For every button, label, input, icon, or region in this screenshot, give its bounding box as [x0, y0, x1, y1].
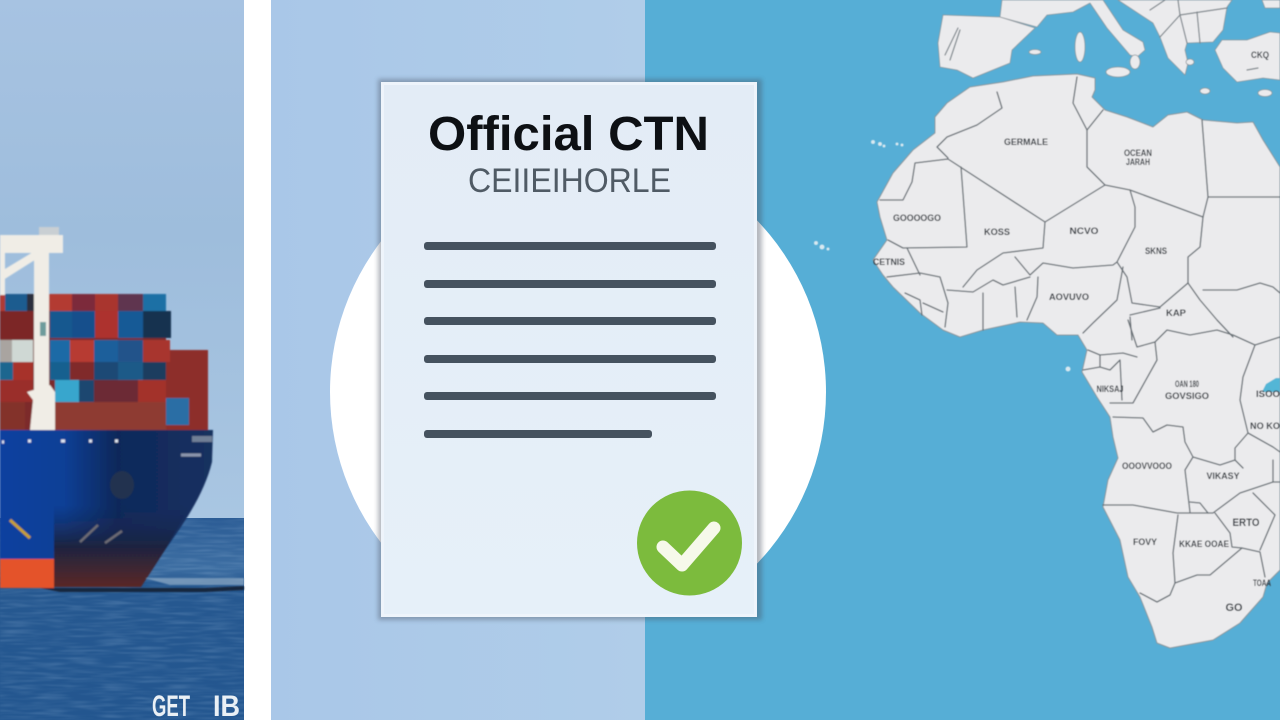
- country labels: ERTO: [1232, 517, 1260, 529]
- country labels: GOVSIGO: [1165, 391, 1209, 401]
- country labels: TOAA: [1253, 578, 1271, 588]
- white circle behind document: [330, 220, 826, 564]
- country labels: ISOO: [1256, 389, 1280, 399]
- document subtitle: CEIIEIHORLE: [468, 162, 671, 200]
- country labels: GERMALE: [1004, 137, 1048, 147]
- red waterline: [0, 559, 54, 588]
- waterline wake: [40, 586, 244, 592]
- document text lines: [424, 242, 716, 438]
- country labels: OOOVVOOO: [1122, 461, 1172, 471]
- document shadow: [378, 79, 762, 620]
- container ship: [0, 227, 244, 592]
- country labels: OCEAN: [1124, 148, 1152, 158]
- Canary and Cape Verde islands: [814, 140, 1070, 372]
- country labels: CKQ: [1251, 50, 1269, 60]
- map of Africa and the Mediterranean: [814, 0, 1280, 648]
- country labels: SKNS: [1145, 246, 1167, 256]
- hull lower dark band: [54, 505, 190, 587]
- Europe borders: [945, 0, 1258, 70]
- sea: [0, 518, 244, 720]
- document title: Official CTN: [428, 108, 709, 161]
- country labels: GO: [1226, 602, 1243, 614]
- icon: green check badge: [637, 490, 742, 596]
- country labels: NCVO: [1070, 226, 1098, 236]
- country labels: KOSS: [984, 227, 1010, 237]
- country labels: KKAE OOAE: [1179, 539, 1229, 549]
- hull: [0, 430, 213, 587]
- country labels: FOVY: [1133, 537, 1157, 547]
- hull details: [2, 436, 212, 543]
- islands: [1075, 32, 1085, 62]
- country borders: [880, 77, 1280, 602]
- panel: container ship photo: [0, 0, 244, 720]
- country labels: KAP: [1166, 308, 1186, 318]
- country labels: GOOOOGO: [893, 213, 941, 223]
- country labels: OAN 180: [1175, 379, 1199, 389]
- document edge highlight: [382, 84, 756, 616]
- country labels: AOVUVO: [1049, 292, 1089, 302]
- sky: [0, 0, 244, 518]
- Africa landmass: [873, 74, 1280, 648]
- country labels: JARAH: [1126, 157, 1150, 167]
- Europe landmasses: [938, 0, 1280, 96]
- country labels: VIKASY: [1206, 471, 1240, 481]
- lake: [1262, 378, 1280, 392]
- panel: blue map backdrop: [645, 0, 1280, 720]
- sea ripples: [0, 518, 244, 720]
- panel: pale blue backdrop: [271, 0, 645, 720]
- document sheet: [381, 82, 757, 617]
- country labels: CETNIS: [873, 257, 905, 267]
- container stack: [0, 294, 208, 430]
- bridge tower: [0, 227, 63, 430]
- country labels: NO KO: [1250, 421, 1280, 431]
- country labels: NIKSAJ: [1096, 384, 1124, 394]
- panel: certificate document: [378, 79, 762, 620]
- country labels: [873, 50, 1280, 614]
